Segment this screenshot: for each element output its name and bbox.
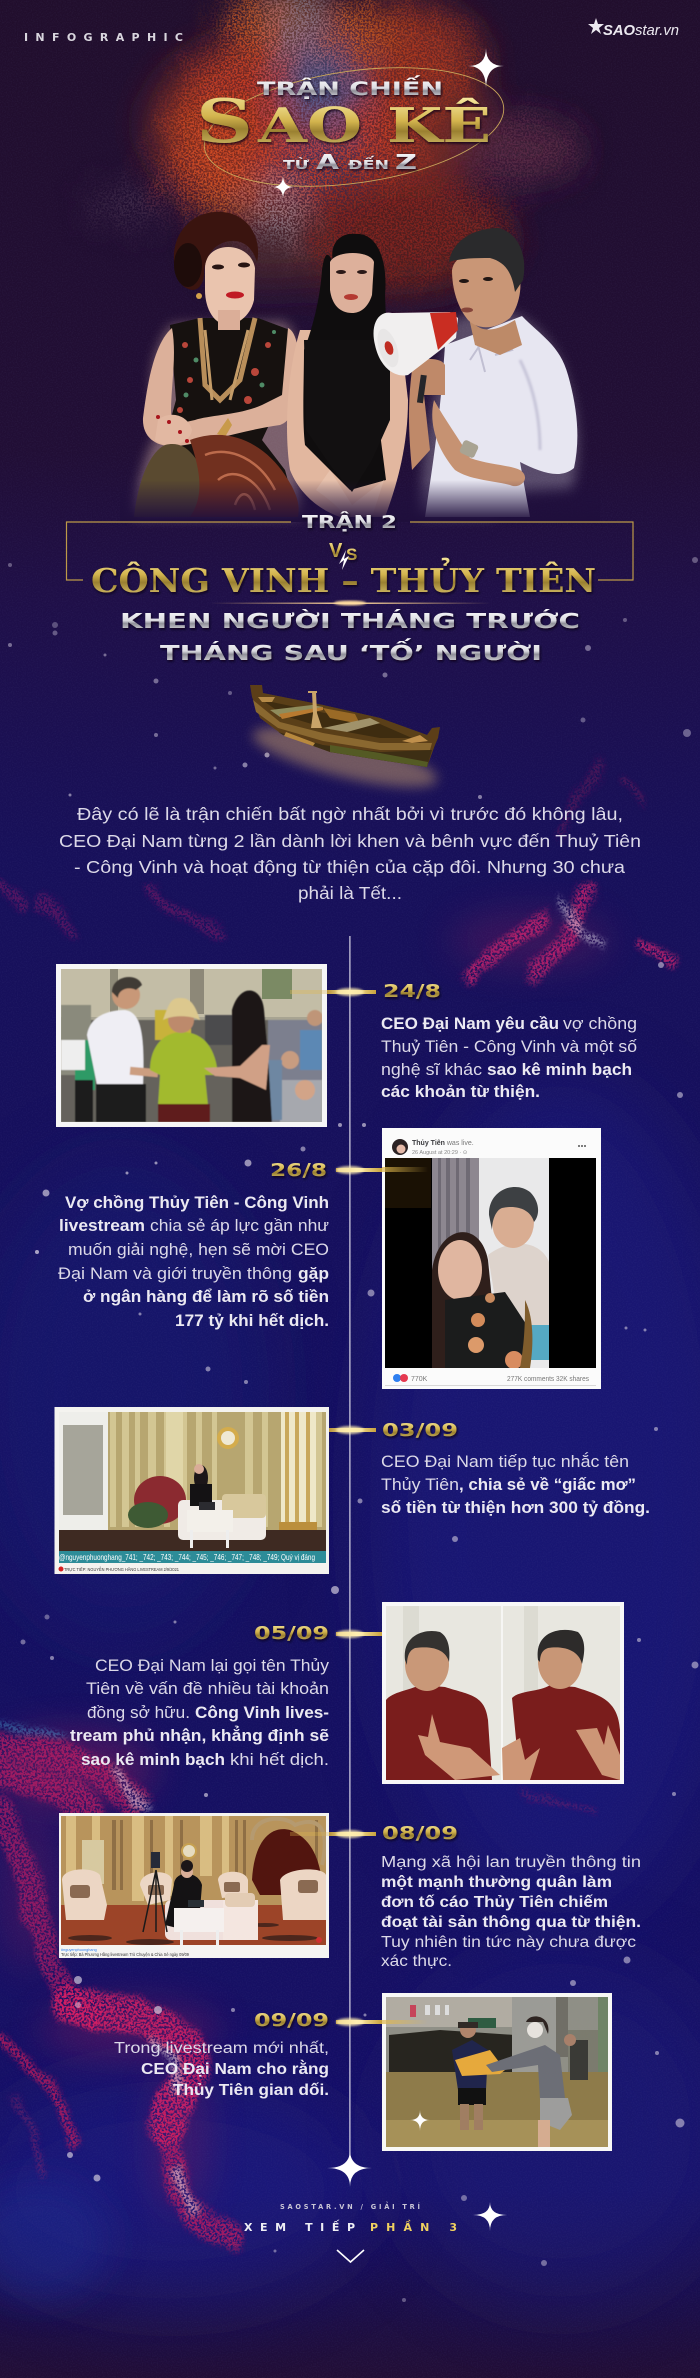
date: 05/09: 05/09 <box>254 1623 329 1644</box>
text: CEO says Thủy Tiên lied: CEO Đại Nam cho rằng <box>141 2060 329 2078</box>
text: couple livestream: Đại Nam và giới truyền thông <box>58 1265 292 1283</box>
title line: SAO KÊ <box>196 87 491 157</box>
date: 09/09: 09/09 <box>254 2010 329 2031</box>
text: 300 billion dream: CEO Đại Nam tiếp tục nhắc tên <box>381 1452 629 1471</box>
icon: sparkle star <box>468 48 504 89</box>
event 03/09 <box>54 1407 650 1574</box>
icon: sparkle on photo <box>410 2110 430 2131</box>
text: CEO demands transparency: sao kê minh bạch <box>487 1061 632 1079</box>
badge: Vs: V <box>329 540 343 562</box>
heading: TRẬN 2: TRẬN 2 <box>302 511 397 533</box>
photo: gold living room: #nguyenphuonghang <box>61 1948 97 1952</box>
call to action: XEM TIẾP PHẦN 3: XEM TIẾP <box>244 2219 355 2234</box>
title line: TỪ A ĐẾN Z <box>283 150 417 174</box>
text: denial from Công Vinh: Tiên về vấn đề nhiều tài khoản <box>86 1680 329 1698</box>
explosion smoke behind the title <box>150 0 580 295</box>
title line: SAO KÊ: AO <box>257 98 362 154</box>
logo: Saostar.vn: SAO <box>603 22 635 39</box>
dust specks <box>8 557 698 2302</box>
photo: livestream room: @nguyenphuonghang_741; _742; _743; _744; _745; _746; _747; _748; _749; Quý vị đáng <box>59 1552 315 1562</box>
text: CEO says Thủy Tiên lied: Trong livestream mới nhất, <box>114 2040 329 2057</box>
text: 300 billion dream: , chia sẻ về “giấc mơ” <box>459 1476 636 1494</box>
text: denial from Công Vinh <box>70 1657 330 1769</box>
date: 03/09: 03/09 <box>382 1420 458 1441</box>
photo: Công Vinh two frames <box>382 1602 624 1784</box>
text: denial from Công Vinh: Công Vinh lives- <box>195 1704 329 1722</box>
text: 300 billion dream: Thủy Tiên <box>381 1476 459 1494</box>
text: social media rumor: Mạng xã hội lan truyền thông tin <box>381 1854 641 1871</box>
text: denial from Công Vinh: tream phủ nhận, khẳng định sẽ <box>70 1726 329 1745</box>
subtitle: THÁNG SAU ‘TỐ’ NGƯỜI <box>160 637 542 665</box>
divider glow <box>210 601 491 605</box>
photo: gold living room: Trực tiếp: Bà Phương Hằng livestream Trò Chuyện & Chia Sẻ ngày 09/09 <box>61 1951 189 1957</box>
photo: flood relief <box>382 1993 612 2151</box>
photo: gold living room <box>59 1813 329 1958</box>
heading: CÔNG VINH - THỦY TIÊN: CÔNG VINH – THỦY TIÊN <box>91 556 596 600</box>
text: denial from Công Vinh: đồng sở hữu. <box>87 1704 190 1722</box>
text: social media rumor: đoạt tài sản thông qua từ thiện. <box>381 1914 641 1931</box>
text: social media rumor: Tuy nhiên tin tức này chưa được <box>381 1934 636 1951</box>
text: 300 billion dream <box>381 1452 650 1517</box>
intro paragraph: CEO Đại Nam từng 2 lần dành lời khen và bênh vực đến Thuỷ Tiên <box>59 831 641 851</box>
event 08/09 <box>59 1813 641 1970</box>
photo: charity handout <box>56 964 327 1127</box>
title line: TỪ A ĐẾN Z: ĐẾN <box>348 156 389 172</box>
text: CEO demands transparency: CEO Đại Nam yêu cầu <box>381 1015 559 1033</box>
title line: TỪ A ĐẾN Z: Z <box>395 150 417 174</box>
subtitle: KHEN NGƯỜI THÁNG TRƯỚC <box>120 608 580 633</box>
photo: Facebook live post: 770K <box>411 1376 428 1383</box>
connector with glow <box>290 988 376 996</box>
text: couple livestream: chia sẻ áp lực gần như <box>150 1217 329 1235</box>
heading frame: TRẬN 2 <box>66 511 633 600</box>
text: CEO demands transparency: nghệ sĩ khác <box>381 1061 482 1079</box>
connector with glow <box>336 2018 428 2026</box>
subtitle <box>120 608 580 665</box>
title block: Trận chiến sao kê từ A đến Z <box>196 51 511 203</box>
icon: timeline end star <box>327 2150 372 2187</box>
event 26/8 <box>58 1128 601 1389</box>
explosion burst specks <box>90 0 580 280</box>
text: social media rumor: một mạnh thường quân làm <box>381 1874 612 1891</box>
title line: SAO KÊ: KÊ <box>387 97 491 154</box>
intro paragraph: - Công Vinh và hoạt động từ thiện của cặp đôi. Nhưng 30 chưa <box>74 857 625 877</box>
text: couple livestream: 177 tỷ khi hết dịch. <box>175 1312 329 1330</box>
nebula: magenta dust <box>0 760 675 2240</box>
text: social media rumor <box>381 1854 641 1970</box>
timeline axis <box>349 936 350 2166</box>
title line: TỪ A ĐẾN Z: A <box>316 150 340 174</box>
photo: livestream room: TRỰC TIẾP: NGUYỄN PHƯƠNG HẰNG LIVESTREAM 2/9/2021 <box>64 1565 179 1573</box>
intro paragraph: Đây có lẽ là trận chiến bất ngờ nhất bởi vì trước đó không lâu, <box>77 804 623 824</box>
title line: TỪ A ĐẾN Z: TỪ <box>283 157 309 172</box>
event 09/09 <box>114 1993 612 2151</box>
person: man in white shirt with megaphone <box>373 228 578 517</box>
connector with glow <box>290 1830 376 1838</box>
text: couple livestream: livestream <box>59 1217 145 1235</box>
connector with glow <box>336 1630 382 1638</box>
text: CEO says Thủy Tiên lied <box>114 2040 329 2099</box>
text: couple livestream: ở ngân hàng để làm rõ số tiền <box>83 1288 329 1306</box>
logo: Saostar.vn <box>588 18 679 39</box>
footer <box>244 2201 507 2262</box>
text: couple livestream <box>58 1194 329 1330</box>
text: CEO demands transparency: vợ chồng <box>563 1015 637 1033</box>
text: denial from Công Vinh: sao kê minh bạch <box>81 1751 225 1769</box>
call to action: XEM TIẾP PHẦN 3 <box>244 2219 457 2234</box>
badge: Vs <box>329 540 357 570</box>
text: CEO demands transparency <box>381 1015 637 1101</box>
text: couple livestream: muốn giải nghệ, hẹn sẽ mời CEO <box>68 1241 329 1259</box>
photo: Facebook live post: Thủy Tiên was live. <box>412 1140 474 1147</box>
event 24/8 <box>56 964 637 1127</box>
text: denial from Công Vinh: CEO Đại Nam lại gọi tên Thủy <box>95 1657 330 1675</box>
text: CEO demands transparency: các khoản từ thiện. <box>381 1083 540 1101</box>
icon: sparkle star <box>272 175 294 199</box>
badge: Vs: S <box>346 545 357 564</box>
person: woman in black <box>287 234 408 517</box>
text: social media rumor: đơn tố cáo Thủy Tiên chiếm <box>381 1894 608 1911</box>
photo: Facebook live post: 277K comments 32K shares <box>507 1376 589 1383</box>
icon: sparkle star <box>473 2202 507 2231</box>
label: INFOGRAPHIC: INFOGRAPHIC <box>24 31 183 44</box>
text: denial from Công Vinh: khi hết dịch. <box>230 1751 329 1769</box>
person: woman in floral dress <box>134 212 302 517</box>
photo: Facebook live post: 26 August at 20:29 · ⊙ <box>412 1150 467 1156</box>
connector with glow <box>329 1426 376 1434</box>
photo: livestream room <box>54 1407 329 1574</box>
text: couple livestream: Vợ chồng Thủy Tiên - Công Vinh <box>65 1194 329 1212</box>
date: 08/09: 08/09 <box>382 1823 458 1844</box>
call to action: XEM TIẾP PHẦN 3: PHẦN 3 <box>370 2220 457 2234</box>
date: 26/8: 26/8 <box>270 1160 327 1181</box>
photo: Facebook live post <box>382 1128 601 1389</box>
logo: Saostar.vn: star.vn <box>635 22 679 39</box>
portraits: three people <box>120 212 600 522</box>
source line: SAOSTAR.VN / GIẢI TRÍ <box>280 2201 421 2211</box>
text: couple livestream: gặp <box>298 1265 329 1283</box>
text: CEO says Thủy Tiên lied: Thủy Tiên gian dối. <box>173 2082 329 2099</box>
text: social media rumor: xác thực. <box>381 1953 452 1970</box>
text: CEO demands transparency: Thuỷ Tiên - Công Vinh và một số <box>381 1038 637 1056</box>
connector with glow <box>336 1166 428 1174</box>
title line: SAO KÊ: S <box>196 87 253 157</box>
event 05/09 <box>70 1602 624 1784</box>
icon: chevron down <box>337 2250 364 2262</box>
illustration: wooden boat <box>248 685 442 799</box>
date: 24/8: 24/8 <box>383 981 441 1002</box>
title line: TRẬN CHIẾN: TRẬN CHIẾN <box>257 76 443 100</box>
intro paragraph: phải là Tết... <box>298 883 402 903</box>
text: 300 billion dream: số tiền từ thiện hơn 300 tỷ đồng. <box>381 1499 650 1517</box>
intro paragraph <box>59 804 641 903</box>
